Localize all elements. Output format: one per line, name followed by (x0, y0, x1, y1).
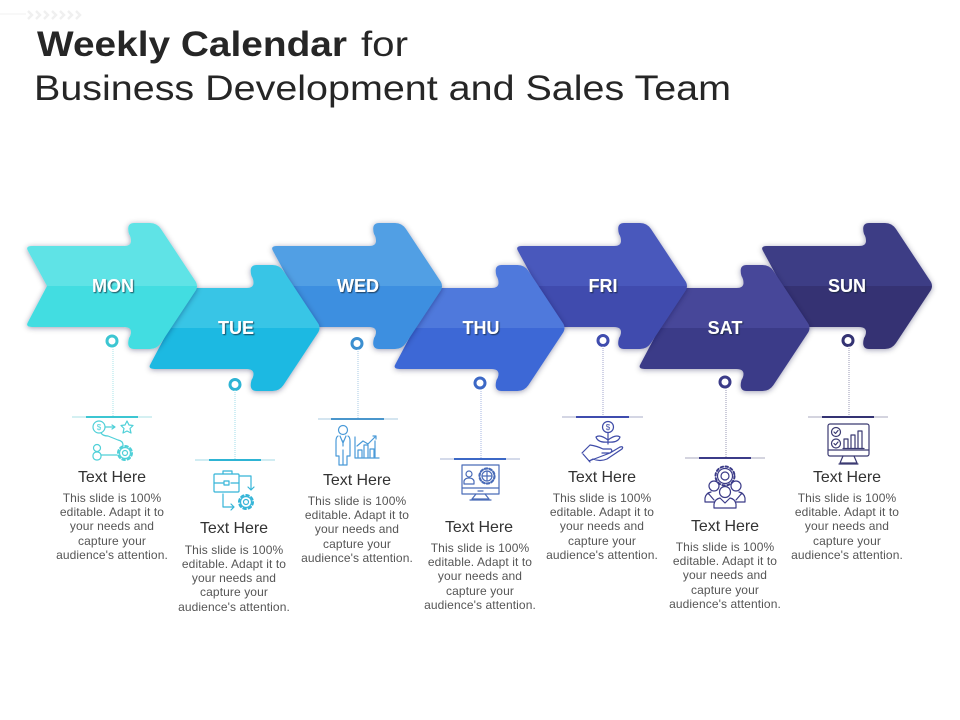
text block: editable. Adapt it to (795, 505, 899, 519)
arrow: FRI (517, 223, 687, 349)
panel: Tuesday (150, 265, 320, 614)
connector line (357, 349, 359, 418)
text block: editable. Adapt it to (550, 505, 654, 519)
connector ring (230, 380, 240, 390)
connector line (848, 346, 850, 416)
text block: editable. Adapt it to (673, 554, 777, 568)
heading rule (72, 416, 152, 418)
heading rule (195, 459, 275, 461)
text block: Text Here (813, 469, 881, 486)
text block: This slide is 100% (553, 491, 651, 505)
label: TUE: TUE (218, 318, 254, 338)
text block: editable. Adapt it to (182, 557, 286, 571)
text block: capture your (323, 537, 391, 551)
text block (301, 472, 413, 565)
icon: hand with plant (582, 422, 623, 462)
text block: editable. Adapt it to (60, 505, 164, 519)
title: Business Development and Sales Team (34, 69, 731, 108)
text block: capture your (691, 583, 759, 597)
arrow: TUE (150, 265, 320, 391)
panel: Thursday (395, 265, 564, 612)
label: SAT: SAT (708, 318, 742, 338)
connector line (480, 389, 482, 458)
heading rule (440, 458, 520, 460)
text block: This slide is 100% (431, 541, 529, 555)
heading rule (562, 416, 643, 418)
text block: your needs and (192, 571, 276, 585)
text block: your needs and (805, 519, 889, 533)
decorative chevrons (0, 11, 80, 19)
connector ring (598, 336, 608, 346)
icon: monitor with person and gear (462, 465, 499, 500)
text block: This slide is 100% (63, 491, 161, 505)
icon: coin, star, person and gear: $ (97, 423, 102, 432)
text block: your needs and (683, 568, 767, 582)
text block (791, 469, 903, 562)
connector ring (720, 377, 730, 387)
connector ring (107, 336, 117, 346)
text block: audience's attention. (56, 548, 168, 562)
label: SUN: SUN (828, 276, 866, 296)
text block: your needs and (315, 522, 399, 536)
connector ring (352, 338, 362, 348)
label: FRI: FRI (588, 276, 618, 296)
icon: team with gear (705, 466, 745, 508)
text block: This slide is 100% (798, 491, 896, 505)
connector ring (843, 336, 853, 346)
text block (669, 518, 781, 611)
text block: audience's attention. (301, 551, 413, 565)
icon: monitor with chart (828, 424, 869, 464)
panel: Monday (27, 223, 197, 562)
text block: audience's attention. (424, 598, 536, 612)
icon: person with chart (336, 426, 379, 465)
title: Weekly Calendar (37, 25, 347, 64)
text block: Text Here (568, 469, 636, 486)
heading rule (685, 457, 765, 459)
connector line (602, 346, 604, 416)
title: for (361, 25, 408, 64)
text block: audience's attention. (546, 548, 658, 562)
text block: your needs and (438, 569, 522, 583)
connector line (112, 347, 114, 416)
icon: briefcase with gear (214, 471, 254, 510)
connector line (725, 388, 727, 457)
text block: Text Here (445, 519, 513, 536)
text block: Text Here (200, 520, 268, 537)
text block: This slide is 100% (676, 540, 774, 554)
title (34, 25, 731, 108)
text block: capture your (813, 534, 881, 548)
arrow: SAT (640, 265, 810, 391)
text block: capture your (200, 585, 268, 599)
text block: This slide is 100% (308, 494, 406, 508)
panel: Sunday (762, 223, 932, 562)
text block: audience's attention. (791, 548, 903, 562)
connector line (234, 390, 236, 459)
text block: capture your (446, 584, 514, 598)
arrow: MON (27, 223, 197, 349)
arrow: SUN (762, 223, 932, 349)
arrow: THU (395, 265, 564, 391)
text block: capture your (78, 534, 146, 548)
icon: hand with plant: $ (606, 423, 611, 432)
text block: editable. Adapt it to (428, 555, 532, 569)
panel: Friday (517, 223, 687, 562)
label: WED: WED (337, 276, 379, 296)
text block (424, 519, 536, 612)
text block: capture your (568, 534, 636, 548)
label: THU: THU (462, 318, 500, 338)
text block: your needs and (70, 519, 154, 533)
text block: your needs and (560, 519, 644, 533)
text block: Text Here (323, 472, 391, 489)
panel: Saturday (640, 265, 810, 611)
text block: Text Here (78, 469, 146, 486)
text block: Text Here (691, 518, 759, 535)
text block (546, 469, 658, 562)
icon: coin, star, person and gear (93, 421, 133, 460)
heading rule (318, 418, 398, 420)
heading rule (808, 416, 888, 418)
arrow: WED (272, 223, 442, 349)
text block: This slide is 100% (185, 543, 283, 557)
label: MON: MON (92, 276, 134, 296)
text block (178, 520, 290, 614)
panel: Wednesday (272, 223, 442, 565)
connector ring (475, 378, 485, 388)
text block (56, 469, 168, 562)
text block: audience's attention. (669, 597, 781, 611)
text block: audience's attention. (178, 600, 290, 614)
text block: editable. Adapt it to (305, 508, 409, 522)
